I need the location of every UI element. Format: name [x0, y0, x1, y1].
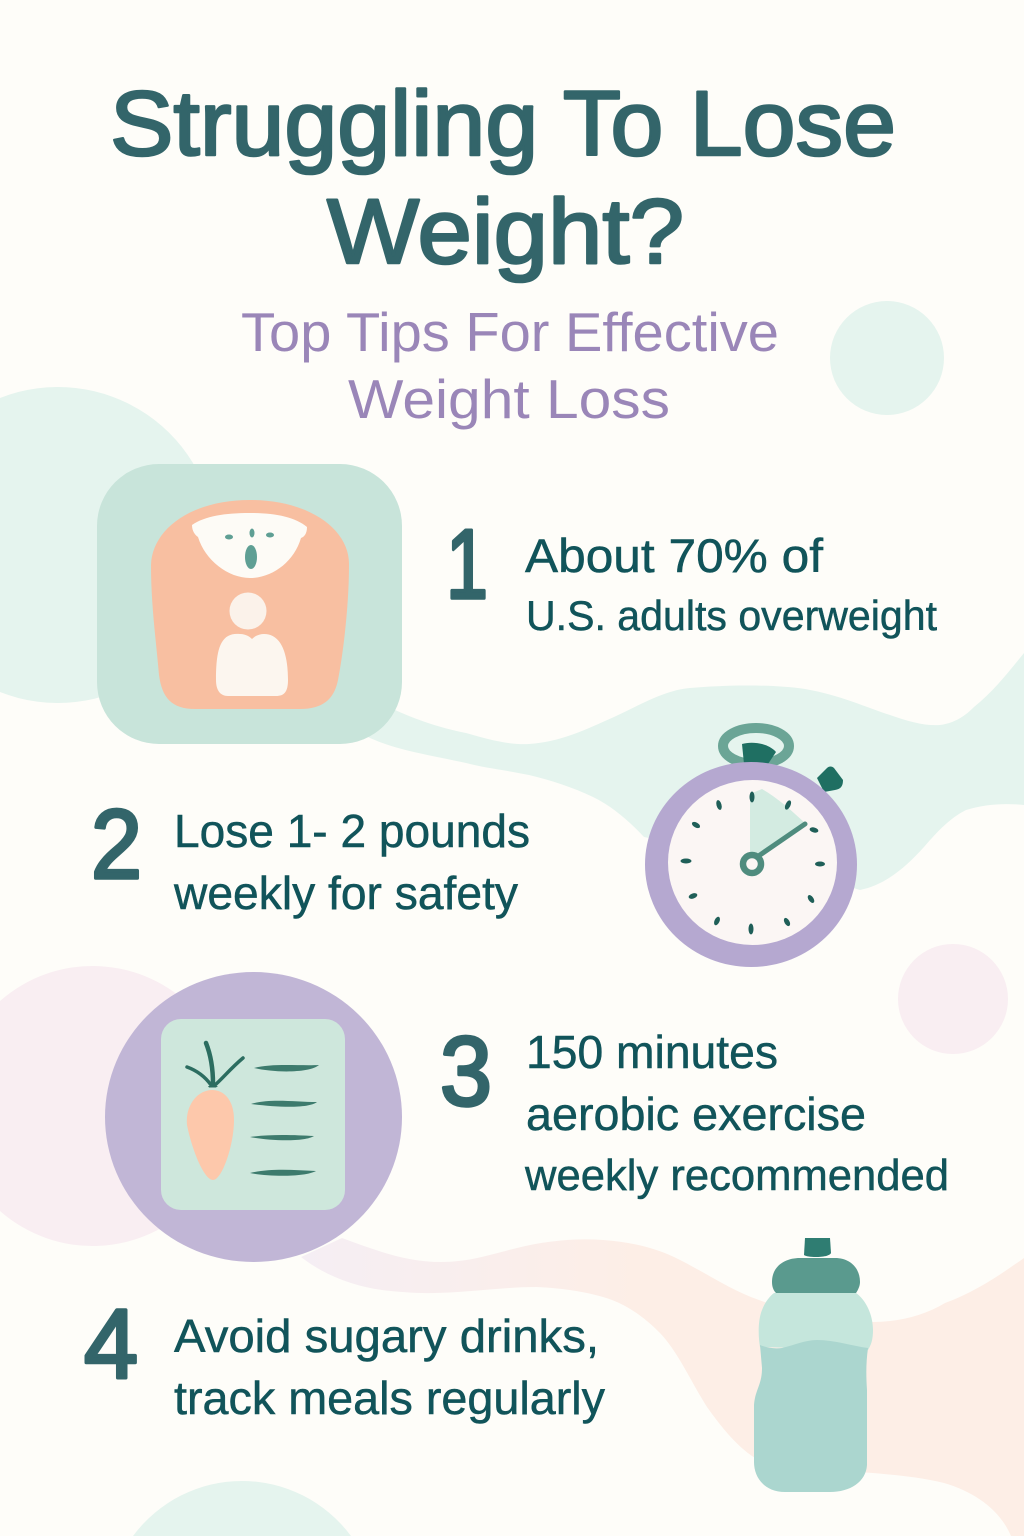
text: tip 4: track meals regularly [174, 1372, 605, 1424]
icon: meal plan with carrot [105, 972, 402, 1262]
text: tip 1 [525, 529, 937, 639]
background wave: pink and peach [301, 1238, 1024, 1536]
subtitle: Weight Loss [348, 368, 670, 430]
text: tip 1: About 70% of [525, 529, 824, 582]
text: tip 2: Lose 1- 2 pounds [174, 805, 530, 857]
text: tip 3 [524, 1026, 949, 1200]
text: tip 4 [174, 1310, 605, 1424]
subtitle: Top Tips For Effective [241, 301, 779, 363]
icon: bathroom scale [97, 464, 402, 744]
number 1: 1 [446, 509, 488, 619]
text: tip 3: 150 minutes [526, 1026, 778, 1078]
background blob: pink left [0, 966, 233, 1246]
background blob: mint upper left [0, 387, 216, 703]
icon: water bottle [754, 1238, 873, 1492]
text: tip 2: weekly for safety [173, 867, 518, 919]
number 3: 3 [440, 1016, 492, 1126]
number 4: 4 [84, 1289, 138, 1399]
icon: stopwatch [645, 728, 857, 967]
number 2: 2 [91, 789, 142, 899]
title [110, 73, 896, 283]
text: tip 3: weekly recommended [524, 1151, 949, 1200]
background circle: pink right [898, 944, 1008, 1054]
subtitle [241, 301, 779, 430]
background circle: mint bottom [133, 1481, 351, 1536]
text: tip 2 [173, 805, 530, 919]
background circle: mint top right [830, 301, 944, 415]
text: tip 3: aerobic exercise [526, 1088, 866, 1140]
background wave: mint [368, 653, 1024, 890]
text: tip 1: U.S. adults overweight [526, 592, 937, 639]
title: Struggling To Lose [110, 73, 896, 175]
title: Weight? [327, 181, 684, 283]
text: tip 4: Avoid sugary drinks, [174, 1310, 599, 1362]
